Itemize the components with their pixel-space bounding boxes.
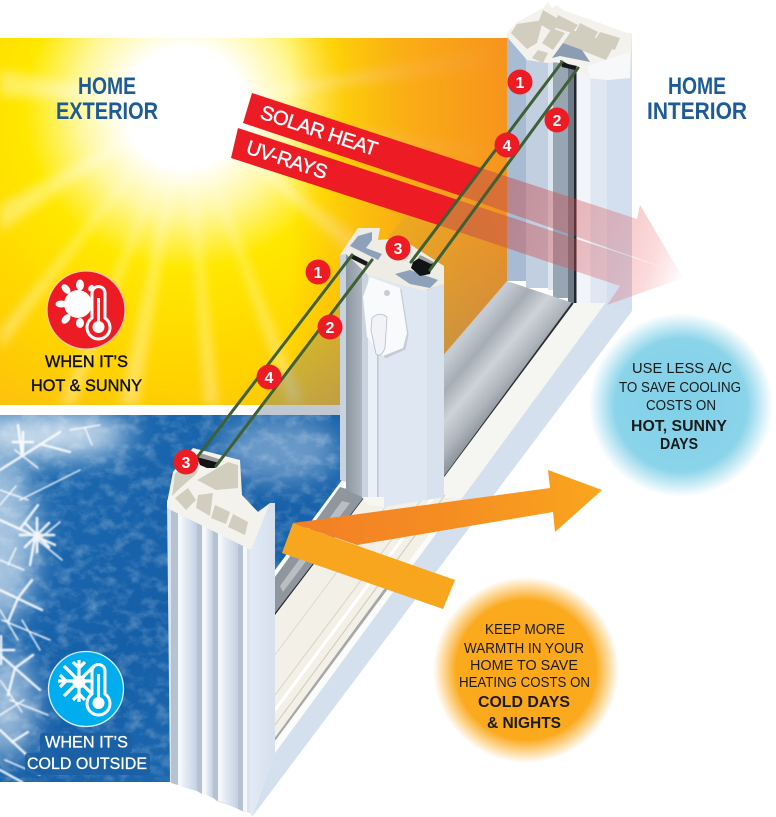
white return lip bbox=[250, 503, 275, 817]
sill: left grey channel bbox=[275, 487, 368, 615]
badge 2 upper: 2 bbox=[553, 113, 562, 130]
badge 4 lower bbox=[256, 364, 282, 390]
right jamb cross-section bbox=[507, 2, 632, 80]
left jamb cross-section bbox=[167, 448, 270, 550]
callout: heating savings bbox=[433, 577, 619, 763]
sill: cream slats bbox=[275, 498, 470, 740]
callout: heating savings: WARMTH IN YOUR bbox=[464, 641, 584, 657]
panel: cold frosty exterior background bbox=[0, 413, 342, 782]
heading: home interior bbox=[647, 73, 747, 125]
badge 1 lower bbox=[306, 260, 330, 284]
window frame: right jamb bbox=[507, 2, 632, 311]
glass tint over the background bbox=[254, 80, 507, 415]
window latch bbox=[363, 277, 408, 358]
callout: cooling savings: HOT, SUNNY bbox=[631, 418, 727, 435]
badge 3 upper bbox=[386, 236, 410, 260]
label: when it's cold outside bbox=[25, 732, 150, 775]
icon: hot and sunny bbox=[47, 271, 125, 349]
callout: heating savings: HOME TO SAVE bbox=[470, 658, 578, 674]
glass panes: green lines bbox=[198, 62, 578, 466]
callout: heating savings: HEATING COSTS ON bbox=[459, 675, 590, 691]
label: when it's hot and sunny: HOT & SUNNY bbox=[31, 376, 142, 395]
callout: cooling savings bbox=[589, 313, 773, 497]
heading: home exterior: EXTERIOR bbox=[56, 98, 158, 125]
badge 4 upper bbox=[494, 132, 520, 158]
sill: white band bbox=[275, 520, 470, 753]
label: when it's hot and sunny bbox=[31, 352, 142, 395]
translucent ray continuation bbox=[438, 168, 683, 305]
heading: home exterior: HOME bbox=[78, 73, 136, 100]
badge 2 lower: 2 bbox=[326, 320, 335, 337]
badge 3 lower: 3 bbox=[182, 455, 191, 472]
label: when it's hot and sunny: WHEN IT’S bbox=[45, 352, 128, 371]
badge 2 upper bbox=[544, 108, 570, 132]
badge 1 upper bbox=[508, 70, 532, 94]
sun rays bbox=[0, 56, 470, 405]
badge 1 upper: 1 bbox=[516, 75, 525, 92]
icon: cold outside bbox=[48, 652, 124, 726]
heading: home exterior bbox=[56, 73, 158, 125]
panel: hot and sunny exterior background bbox=[0, 38, 507, 405]
badge 2 lower bbox=[318, 314, 342, 340]
badge 1 lower: 1 bbox=[314, 265, 323, 282]
callout: heating savings: COLD DAYS bbox=[478, 694, 570, 711]
callout: cooling savings: COSTS ON bbox=[646, 398, 716, 414]
uv-rays band bbox=[231, 128, 458, 225]
label: when it's cold outside: WHEN IT’S bbox=[45, 732, 128, 752]
window frame: middle meeting rail bbox=[340, 228, 444, 507]
solar heat and UV rays bbox=[231, 93, 683, 305]
callout: cooling savings: DAYS bbox=[660, 436, 698, 453]
sill: grey slats behind the meeting rail bbox=[440, 281, 573, 484]
badge 3 lower bbox=[174, 450, 198, 474]
sill: outer blue-white frame bbox=[252, 301, 632, 817]
label: when it's cold outside: COLD OUTSIDE bbox=[27, 754, 147, 773]
badge 3 upper: 3 bbox=[394, 241, 403, 258]
number badges bbox=[174, 70, 570, 474]
heading: home interior: INTERIOR bbox=[647, 98, 747, 125]
badge 4 upper: 4 bbox=[503, 138, 512, 155]
solar heat band bbox=[243, 93, 481, 196]
orange heat arrow bbox=[282, 470, 602, 609]
callout: cooling savings: USE LESS A/C bbox=[632, 361, 732, 377]
badge 4 lower: 4 bbox=[265, 370, 274, 387]
solar heat band: SOLAR HEAT bbox=[257, 102, 380, 161]
ribbed exterior face bbox=[167, 500, 250, 813]
window frame: bottom sill bbox=[252, 281, 632, 817]
window frame: left jamb bbox=[167, 448, 275, 817]
heading: home interior: HOME bbox=[668, 73, 726, 100]
callout: cooling savings: TO SAVE COOLING bbox=[619, 380, 741, 396]
callout: heating savings: KEEP MORE bbox=[485, 622, 565, 638]
callout: heating savings: & NIGHTS bbox=[487, 715, 561, 732]
uv-rays band: UV-RAYS bbox=[243, 137, 330, 184]
frost crystals bbox=[0, 425, 100, 782]
rail cross-section bbox=[340, 228, 444, 291]
